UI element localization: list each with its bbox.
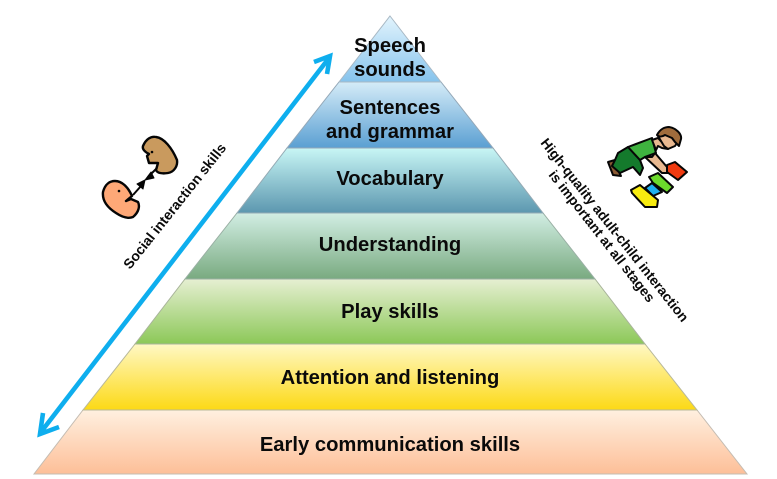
pyramid layer: speech sounds: Speech <box>354 35 426 57</box>
pyramid layer: early communication skills: Early communication skills <box>260 434 520 456</box>
label: adult-child interaction: is important at all stages <box>546 167 659 305</box>
pyramid layer: sentences and grammar: and grammar <box>326 121 454 143</box>
double-headed arrow: social interaction <box>40 56 330 434</box>
pyramid layer: attention and listening: Attention and listening <box>281 367 499 389</box>
pyramid layer: understanding <box>185 213 595 279</box>
pyramid layer: vocabulary <box>237 148 543 213</box>
label: adult-child interaction: High-quality adult-child interaction <box>538 135 692 325</box>
pyramid layer: early communication skills <box>34 410 747 474</box>
pyramid layer: play skills: Play skills <box>341 301 439 323</box>
pyramid layer: sentences and grammar: Sentences <box>340 97 440 119</box>
pyramid layer: play skills <box>135 279 645 344</box>
pyramid layer: attention and listening <box>83 344 697 410</box>
pyramid layer: speech sounds: sounds <box>354 59 426 81</box>
pyramid layer: speech sounds <box>339 16 441 82</box>
pyramid layer: sentences and grammar <box>287 82 493 148</box>
pyramid layer: understanding: Understanding <box>319 234 461 256</box>
pyramid layer: vocabulary: Vocabulary <box>336 168 444 190</box>
label: social interaction skills: Social interaction skills <box>120 140 229 272</box>
icon: child playing with blocks <box>608 127 687 207</box>
icon: two talking faces <box>103 137 177 218</box>
